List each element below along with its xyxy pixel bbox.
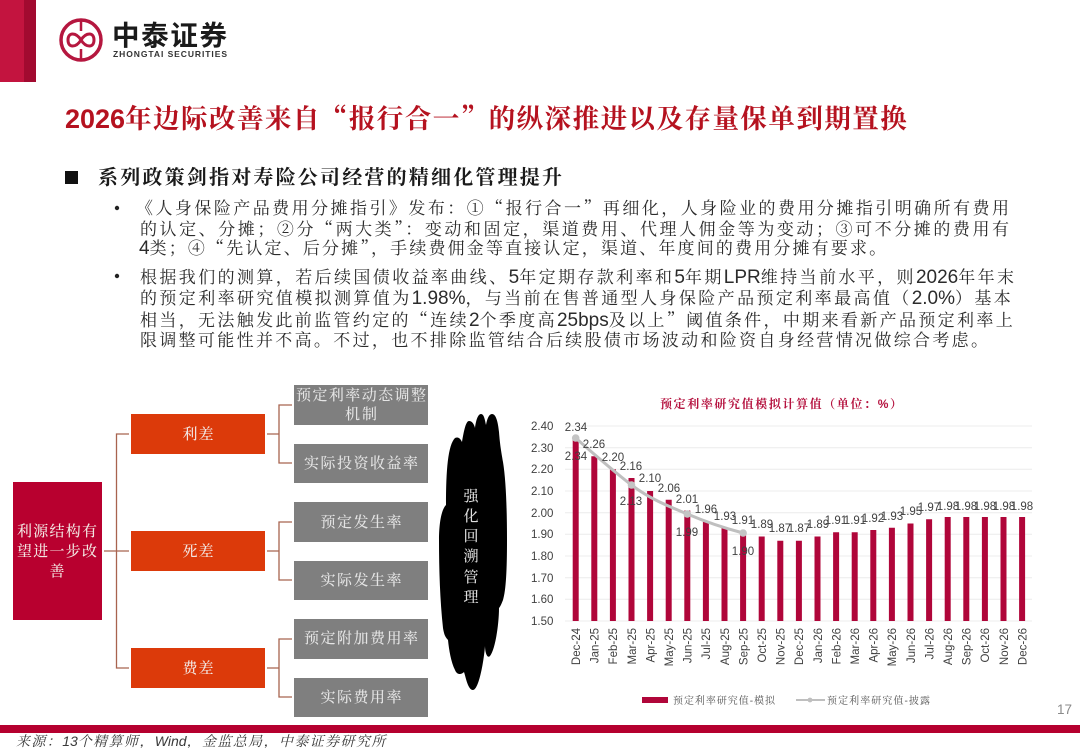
- grid lines and y axis: [531, 421, 1032, 628]
- box: mortality margin: [131, 531, 265, 571]
- bullet text: expense allocation guideline: [115, 194, 1009, 259]
- data labels: simulated series: 1.91: [825, 515, 847, 527]
- data labels: simulated series: 2.20: [602, 452, 624, 464]
- grid lines and y axis: 1.80: [531, 551, 553, 563]
- data labels: simulated series: 1.93: [881, 511, 903, 523]
- box: expected incidence: 预定发生率: [320, 511, 402, 532]
- box: dynamic pricing rate: 预定利率动态调整: [296, 384, 426, 405]
- legend: 预定利率研究值-披露: [827, 692, 930, 707]
- black brush shape: strengthen look-back management: 回: [463, 525, 479, 546]
- bullet text: pricing rate estimate: [115, 263, 1016, 351]
- x axis month labels: Apr-26: [869, 628, 881, 663]
- x axis month labels: Sep-26: [962, 628, 974, 665]
- data labels: simulated series: 1.97: [918, 502, 940, 514]
- x axis month labels: Nov-26: [999, 628, 1011, 665]
- x axis month labels: Mar-26: [850, 628, 862, 664]
- box: dynamic pricing rate: 机制: [345, 403, 377, 424]
- data labels: disclosed series: 2.13: [620, 496, 642, 508]
- box: actual incidence: 实际发生率: [320, 569, 402, 590]
- box: actual incidence: [294, 561, 428, 600]
- black brush shape: strengthen look-back management: 强: [463, 485, 479, 506]
- x axis month labels: Aug-26: [943, 628, 955, 665]
- data labels: simulated series: 1.98: [955, 501, 977, 513]
- x axis month labels: Dec-25: [794, 628, 806, 665]
- data labels: simulated series: 2.01: [676, 494, 698, 506]
- x axis month labels: May-26: [887, 628, 899, 666]
- grid lines and y axis: 2.40: [531, 421, 553, 433]
- legend: [642, 692, 930, 707]
- data labels: simulated series: 1.98: [974, 501, 996, 513]
- grid lines and y axis: 2.20: [531, 464, 553, 476]
- grid lines and y axis: 2.30: [531, 443, 553, 455]
- icon: Zhongtai logo: [61, 20, 101, 60]
- box: expected loading: 预定附加费用率: [304, 627, 418, 648]
- bullet text: pricing rate estimate: 的预定利率研究值模拟测算值为1.98%，与当前在售普通型人身保险产品预定利率最高值（2.0%）基本: [140, 284, 1013, 309]
- data labels: simulated series: 1.91: [844, 515, 866, 527]
- logo wordmark: 中泰证券: [112, 13, 228, 53]
- black brush shape: strengthen look-back management: 溯: [463, 545, 479, 566]
- data labels: simulated series: 1.87: [769, 523, 791, 535]
- bullet text: expense allocation guideline: 的认定、分摊；②分“两大类”：变动和固定，渠道费用、代理人佣金等为变动；③可不分摊的费用有: [140, 215, 1009, 240]
- x axis month labels: Feb-25: [608, 628, 620, 664]
- box: expected loading: [294, 619, 428, 659]
- data labels: disclosed series: 2.34: [565, 451, 588, 463]
- box: interest margin: 利差: [182, 423, 214, 444]
- box: mortality margin: 死差: [182, 540, 214, 561]
- box: actual investment yield: [294, 444, 428, 483]
- box: interest margin: [131, 414, 265, 454]
- data labels: disclosed series: 1.99: [676, 527, 698, 539]
- data labels: disclosed series: 1.90: [732, 546, 754, 558]
- root box: 望进一步改: [17, 540, 97, 561]
- legend: 预定利率研究值-模拟: [673, 692, 776, 707]
- box: expense margin: 费差: [182, 657, 214, 678]
- bars: simulated values: [573, 439, 1025, 621]
- grid lines and y axis: 1.90: [531, 529, 553, 541]
- data labels: simulated series: 1.89: [807, 519, 829, 531]
- data labels: simulated series: 2.06: [658, 483, 680, 495]
- x axis month labels: Jul-26: [924, 628, 936, 659]
- grid lines and y axis: 1.70: [531, 573, 553, 585]
- bullet text: expense allocation guideline: 《人身保险产品费用分摊指引》发布：①“报行合一”再细化，人身险业的费用分摊指引明确所有费用: [136, 194, 1009, 219]
- bullet text: pricing rate estimate: 相当，无法触发此前监管约定的“连续2个季度高25bps及以上”阈值条件，中期来看新产品预定利率上: [140, 306, 1015, 331]
- data labels: simulated series: 2.10: [639, 473, 661, 485]
- x axis month labels: Feb-26: [831, 628, 843, 664]
- diagram: profit source structure: [13, 384, 428, 717]
- x axis month labels: Jun-26: [906, 628, 918, 663]
- data labels: simulated series: 1.98: [1011, 501, 1033, 513]
- black brush shape: strengthen look-back management: 化: [463, 505, 479, 526]
- box: expected incidence: [294, 502, 428, 542]
- data labels: simulated series: 1.96: [695, 504, 717, 516]
- grid lines and y axis: 2.10: [531, 486, 553, 498]
- header accent block: [0, 0, 36, 82]
- x axis month labels: Jul-25: [701, 628, 713, 659]
- data labels: simulated series: 1.91: [732, 515, 754, 527]
- data labels: disclosed series: [565, 451, 754, 558]
- x axis month labels: Dec-26: [1017, 628, 1029, 665]
- x axis month labels: Dec-24: [571, 627, 583, 665]
- data labels: simulated series: 2.34: [565, 422, 588, 434]
- x axis month labels: Oct-26: [980, 628, 992, 663]
- x axis month labels: Nov-25: [776, 628, 788, 665]
- bullet text: pricing rate estimate: 限调整可能性并不高。不过，也不排除监管结合后续股债市场波动和险资自身经营情况做综合考虑。: [140, 326, 988, 351]
- bullet text: pricing rate estimate: 根据我们的测算，若后续国债收益率曲线、5年定期存款利率和5年期LPR维持当前水平，则2026年年末: [140, 263, 1016, 288]
- data labels: simulated series: 1.95: [900, 506, 922, 518]
- data labels: simulated series: 1.93: [714, 511, 736, 523]
- box: actual expense: [294, 678, 428, 717]
- x axis month labels: Oct-25: [757, 628, 769, 663]
- black brush shape: strengthen look-back management: [439, 414, 507, 690]
- x axis month labels: Sep-25: [738, 628, 750, 665]
- title: 2026年边际改善来自“报行合一”的纵深推进以及存量保单到期置换: [65, 97, 908, 136]
- chart title: 预定利率研究值模拟计算值（单位：%）: [660, 395, 902, 412]
- x axis month labels: Jan-26: [813, 628, 825, 663]
- root box: 善: [49, 560, 65, 581]
- data labels: simulated series: 1.89: [751, 519, 773, 531]
- x axis month labels: Jun-25: [683, 628, 695, 663]
- root box: [13, 482, 102, 620]
- x axis month labels: Aug-25: [720, 628, 732, 665]
- data labels: simulated series: [565, 422, 1033, 535]
- box: expense margin: [131, 648, 265, 688]
- x axis month labels: May-25: [664, 628, 676, 666]
- page number: 17: [1057, 702, 1072, 717]
- x axis month labels: Apr-25: [645, 628, 657, 663]
- black brush shape: strengthen look-back management: 理: [463, 586, 479, 607]
- data labels: simulated series: 2.16: [620, 461, 642, 473]
- box: dynamic pricing rate: [294, 384, 428, 425]
- box: actual investment yield: 实际投资收益率: [304, 452, 418, 473]
- x axis month labels: Mar-25: [627, 628, 639, 664]
- grid lines and y axis: 1.50: [531, 616, 553, 628]
- section heading: 系列政策剑指对寿险公司经营的精细化管理提升: [98, 161, 562, 190]
- footer bar: [0, 725, 1080, 733]
- box: actual expense: 实际费用率: [320, 686, 402, 707]
- logo wordmark: ZHONGTAI SECURITIES: [113, 49, 227, 59]
- data labels: simulated series: 1.98: [937, 501, 959, 513]
- data labels: simulated series: 2.26: [583, 439, 605, 451]
- black brush shape: strengthen look-back management: 管: [463, 566, 479, 587]
- data labels: simulated series: 1.98: [993, 501, 1015, 513]
- x axis month labels: Jan-25: [590, 628, 602, 663]
- bullet text: expense allocation guideline: 4类；④“先认定、后分摊”，手续费佣金等直接认定，渠道、年度间的费用分摊有要求。: [139, 234, 888, 259]
- x axis month labels: [571, 627, 1029, 666]
- grid lines and y axis: 1.60: [531, 594, 553, 606]
- bar and line chart: pricing rate research value: [531, 421, 1033, 707]
- line: disclosed values: [572, 434, 747, 537]
- data labels: simulated series: 1.87: [788, 523, 810, 535]
- grid lines and y axis: 2.00: [531, 508, 553, 520]
- connectors: [104, 405, 292, 697]
- root box: 利源结构有: [17, 520, 97, 541]
- data labels: simulated series: 1.92: [862, 513, 884, 525]
